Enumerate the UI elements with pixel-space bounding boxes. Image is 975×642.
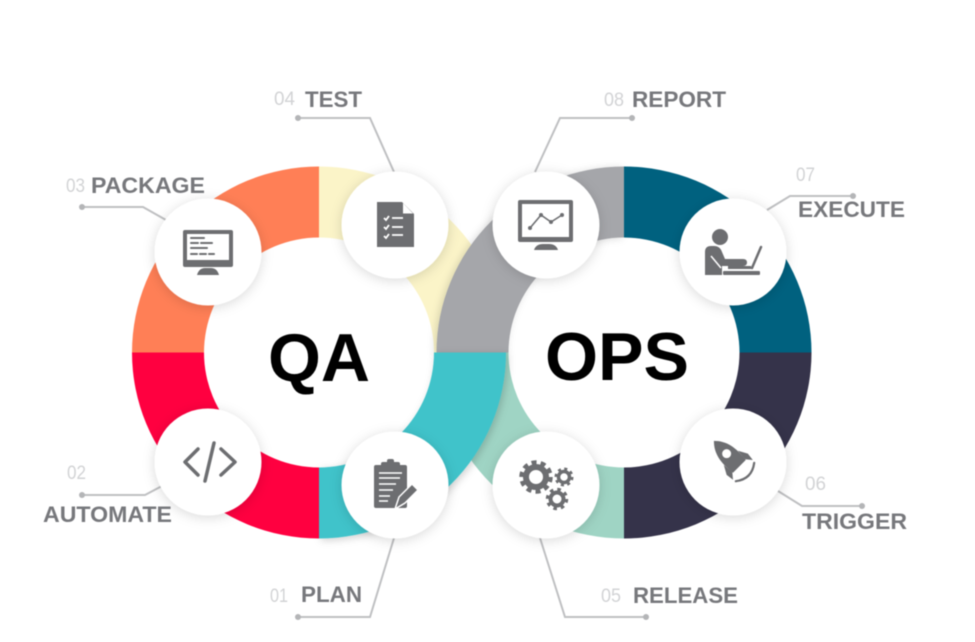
node disc: execute [680,198,786,306]
label: 07 EXECUTE [796,165,905,222]
label: 01 PLAN [270,582,362,607]
label: 02 AUTOMATE [43,463,172,527]
icon: monitor with line chart [518,200,573,250]
label: 02 AUTOMATE: AUTOMATE [43,502,172,527]
label: 04 TEST [274,87,363,112]
leader: execute [767,193,856,210]
segment: automate (red) [132,352,319,538]
segment: package (orange) [132,166,319,352]
icon: monitor with text lines [183,230,233,275]
segment: execute (dark teal) [624,166,812,352]
label: 08 REPORT: 08 [604,90,624,111]
label: 06 TRIGGER [802,474,907,534]
label: 08 REPORT: REPORT [632,87,727,112]
icon: code brackets [185,443,235,481]
node disc: trigger [680,408,786,516]
node disc: automate [154,408,262,516]
label: 04 TEST: TEST [305,87,363,112]
icon: gears [522,462,572,508]
leader: release [540,538,649,620]
leader: package [79,204,166,220]
segment: report (gray) [436,166,624,352]
label: 05 RELEASE: 05 [601,586,621,607]
node disc: report [492,172,600,278]
node disc: package [154,198,262,306]
title: OPS: OPS [545,319,689,395]
label: 06 TRIGGER: TRIGGER [802,509,907,534]
label: 01 PLAN: 01 [270,586,288,607]
leader: trigger [778,491,865,509]
label: 05 RELEASE: RELEASE [633,583,738,608]
icon: person at laptop [705,229,761,275]
label: 06 TRIGGER: 06 [805,474,826,495]
icon: rocket [703,430,759,486]
label: 07 EXECUTE: 07 [796,165,815,186]
label: 01 PLAN: PLAN [301,582,362,607]
node disc: release [492,432,600,538]
leader: automate [79,486,162,498]
label: 07 EXECUTE: EXECUTE [798,197,905,222]
node disc: test [342,172,448,278]
icon: clipboard and pencil [374,459,418,509]
title: QA: QA [268,320,370,396]
leader: test [295,115,394,172]
node disc: plan [342,432,448,538]
segment: plan (teal) [319,352,506,538]
icon: checklist document [377,202,414,247]
segment: release (mint) [436,352,624,538]
leader: plan [295,538,394,620]
label: 03 PACKAGE: PACKAGE [91,173,205,198]
segment: trigger (navy) [624,352,812,538]
leader: report [535,115,635,172]
label: 03 PACKAGE: 03 [66,176,85,197]
label: 04 TEST: 04 [274,89,295,110]
segment: test (yellow) [319,166,506,352]
label: 02 AUTOMATE: 02 [67,463,86,484]
